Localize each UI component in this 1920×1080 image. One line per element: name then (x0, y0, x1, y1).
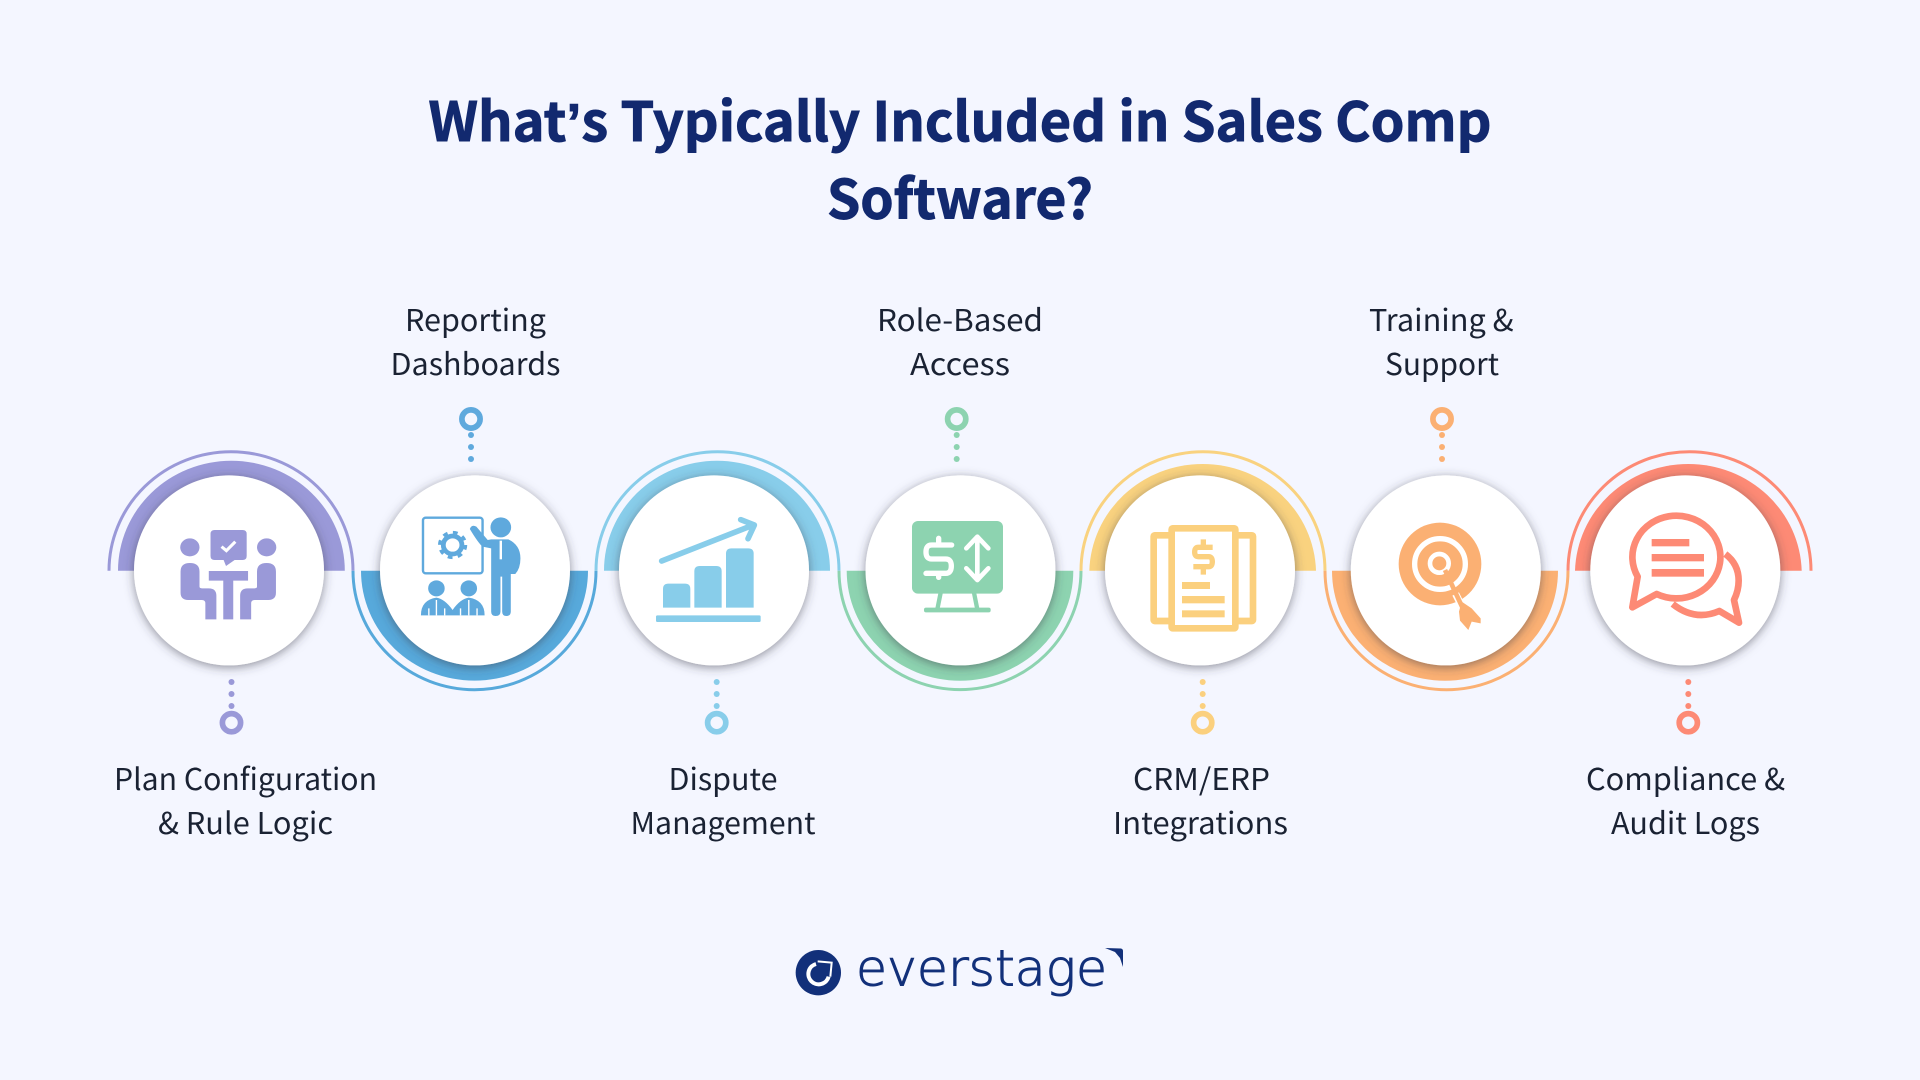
label: Integrations (1113, 799, 1288, 843)
connector dots (1433, 410, 1451, 462)
icon: target with dart (1399, 523, 1481, 630)
title: What’s Typically Included in Sales Comp (428, 78, 1492, 157)
arc band orange (1325, 571, 1568, 690)
icon: monitor with dollar (912, 521, 1003, 612)
label: Management (630, 799, 816, 843)
title: Software? (827, 156, 1093, 234)
step 4: Role-Based Access (839, 296, 1081, 690)
step 7: Compliance & Audit Logs (1568, 452, 1811, 843)
connector dots (462, 410, 480, 462)
label (390, 296, 560, 384)
label: Reporting (405, 296, 546, 340)
step 3: Dispute Management (596, 452, 839, 843)
icon: presenter (421, 517, 520, 616)
white circle (866, 475, 1056, 665)
label (630, 755, 816, 843)
label (877, 296, 1043, 384)
white circle (1590, 475, 1780, 665)
connector dots (948, 410, 966, 462)
label: Training & (1369, 296, 1514, 340)
label: Audit Logs (1611, 799, 1760, 843)
connector dots (222, 679, 241, 732)
label (114, 755, 377, 843)
title (428, 78, 1492, 234)
label: Dispute (668, 755, 778, 799)
label (1369, 296, 1514, 384)
label: Dashboards (390, 340, 560, 384)
connector dots (1679, 679, 1697, 732)
step 1: Plan Configuration (109, 452, 377, 843)
label (1586, 755, 1785, 843)
label: Compliance & (1586, 755, 1785, 799)
label (1113, 755, 1288, 843)
logo: everstage (796, 940, 1123, 998)
white circle (1105, 475, 1295, 665)
white circle (619, 475, 809, 665)
icon: meeting (180, 530, 276, 619)
label: Role-Based (877, 296, 1043, 340)
white circle (380, 475, 570, 665)
white circle (1351, 475, 1541, 665)
arc band blue (353, 571, 596, 690)
connector dots (708, 679, 726, 732)
label: Access (910, 340, 1010, 384)
arc band green (839, 571, 1081, 690)
label: CRM/ERP (1133, 755, 1270, 799)
step 5: CRM/ERP Integrations (1081, 452, 1325, 843)
icon: documents with dollar (1154, 528, 1253, 628)
label: Plan Configuration (114, 755, 377, 799)
label: & Rule Logic (158, 799, 333, 843)
wordmark: everstage (856, 940, 1107, 998)
icon: growth chart (656, 520, 761, 622)
arc band light blue (596, 452, 839, 571)
arc band yellow (1081, 452, 1325, 571)
arc band purple (109, 452, 353, 571)
logo accent (1105, 948, 1123, 967)
arc band coral (1568, 452, 1811, 571)
icon: chat bubbles (1632, 516, 1739, 623)
icon: logo mark (796, 950, 841, 995)
white circle (134, 475, 324, 665)
step 2: Reporting Dashboards (353, 296, 596, 690)
label: Support (1385, 340, 1499, 384)
connector dots (1194, 679, 1212, 732)
step 6: Training & Support (1325, 296, 1568, 690)
